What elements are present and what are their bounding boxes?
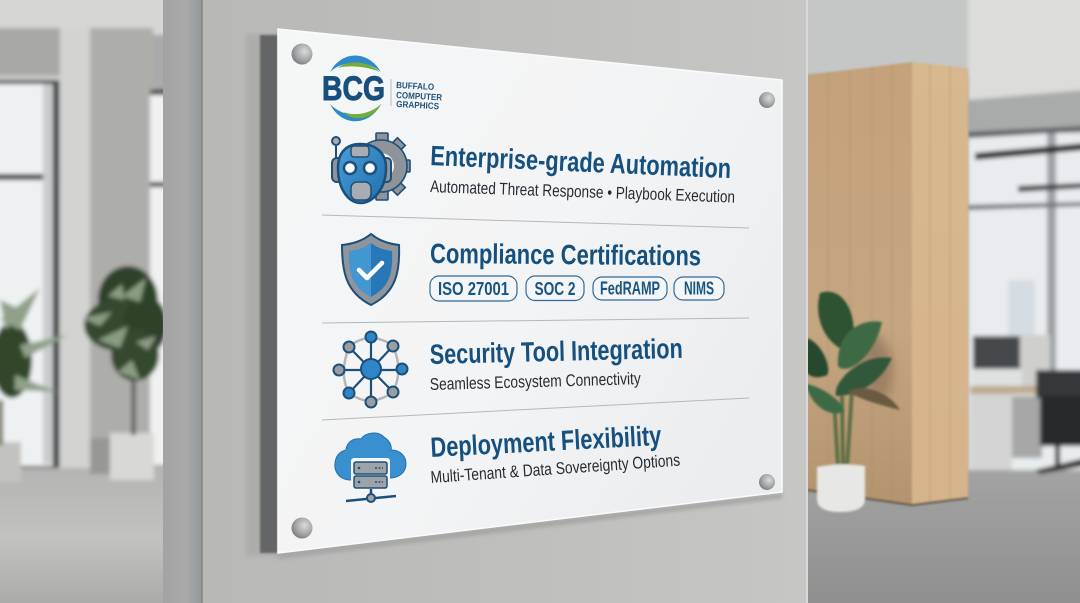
logo: BCG: BUFFALO	[396, 80, 434, 92]
badge: ISO 27001: ISO 27001	[438, 279, 509, 299]
logo: BCG: BCG	[322, 70, 385, 108]
background: wood column	[807, 62, 968, 505]
screw: bottom left	[292, 518, 312, 538]
screw: top left	[292, 44, 312, 64]
plate shadow	[246, 34, 782, 559]
heading: Enterprise-grade Automation: Enterprise-grade Automation	[430, 140, 732, 184]
heading: Security Tool Integration: Security Tool Integration	[429, 333, 683, 370]
text: integration subtitle: Seamless Ecosystem Connectivity	[430, 369, 641, 394]
badge: ISO 27001	[430, 276, 517, 301]
heading: Deployment Flexibility: Deployment Flexibility	[430, 420, 662, 463]
icon: network hub	[334, 332, 408, 408]
background: corner of concrete wall	[163, 0, 202, 603]
text: deployment subtitle: Multi-Tenant & Data Sovereignty Options	[430, 451, 681, 487]
background: plant beside the column	[804, 292, 900, 512]
background: left office scene	[0, 0, 170, 603]
screw: bottom right	[759, 474, 775, 490]
logo: BCG: COMPUTER	[396, 90, 443, 102]
icon: cloud with server	[335, 433, 406, 502]
icon: shield with check	[342, 234, 399, 305]
icon part: gear	[355, 133, 410, 200]
logo: BCG	[322, 56, 443, 121]
badge: NIMS: NIMS	[684, 278, 714, 298]
background: right office scene	[800, 0, 1080, 603]
badge: SOC 2: SOC 2	[534, 279, 576, 299]
heading: Compliance Certifications: Compliance Certifications	[430, 238, 701, 271]
panel: acrylic sign plate	[278, 29, 782, 553]
badge: FedRAMP	[593, 277, 667, 300]
background: concrete wall	[202, 0, 806, 603]
logo: BCG: GRAPHICS	[396, 99, 439, 111]
badge: SOC 2	[526, 276, 584, 300]
text: automation subtitle: Automated Threat Response • Playbook Execution	[430, 177, 735, 207]
badge: NIMS	[674, 277, 724, 300]
badge: FedRAMP: FedRAMP	[600, 278, 660, 298]
screw: top right	[759, 92, 775, 108]
icon: robot head with gear	[332, 133, 410, 203]
